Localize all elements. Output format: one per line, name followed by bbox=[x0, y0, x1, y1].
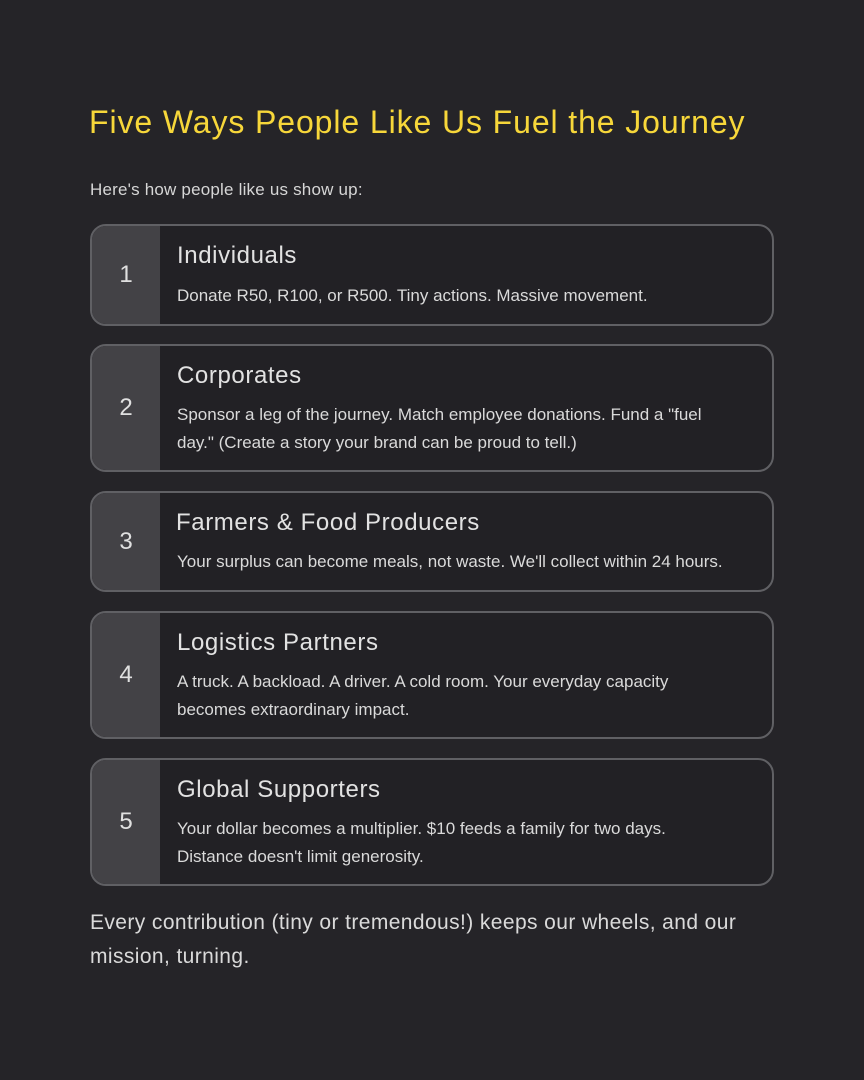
card 5: 5 bbox=[119, 808, 133, 835]
card 1 bbox=[90, 224, 774, 326]
card 4: A truck. A backload. A driver. A cold room. Your everyday capacity becomes extraordinary impact. bbox=[177, 672, 668, 719]
subtitle: Here's how people like us show up: bbox=[90, 180, 363, 199]
card 4 bbox=[90, 611, 774, 739]
card 2 bbox=[90, 344, 774, 472]
footer text: Every contribution (tiny or tremendous!) keeps our wheels, and our mission, turning. bbox=[90, 911, 736, 968]
card 4: Logistics Partners bbox=[177, 629, 379, 656]
card 1: Donate R50, R100, or R500. Tiny actions. Massive movement. bbox=[177, 286, 648, 305]
card 4: 4 bbox=[119, 661, 133, 688]
card 5: Global Supporters bbox=[177, 776, 381, 803]
card 1: Individuals bbox=[177, 242, 297, 269]
title: Five Ways People Like Us Fuel the Journey bbox=[89, 104, 745, 140]
card 3: Your surplus can become meals, not waste. We'll collect within 24 hours. bbox=[177, 552, 723, 571]
card 3: 3 bbox=[119, 528, 133, 554]
card 3: Farmers & Food Producers bbox=[176, 509, 480, 536]
card 2: 2 bbox=[119, 394, 133, 421]
card 5 bbox=[90, 758, 774, 886]
card 2: Corporates bbox=[177, 362, 302, 389]
card 1: 1 bbox=[119, 261, 133, 288]
card 5: Your dollar becomes a multiplier. $10 feeds a family for two days. Distance doesn't limit generosity. bbox=[177, 819, 666, 866]
card 3 bbox=[90, 491, 774, 592]
card 2: Sponsor a leg of the journey. Match employee donations. Fund a "fuel day." (Create a story your brand can be proud to tell.) bbox=[177, 405, 702, 452]
